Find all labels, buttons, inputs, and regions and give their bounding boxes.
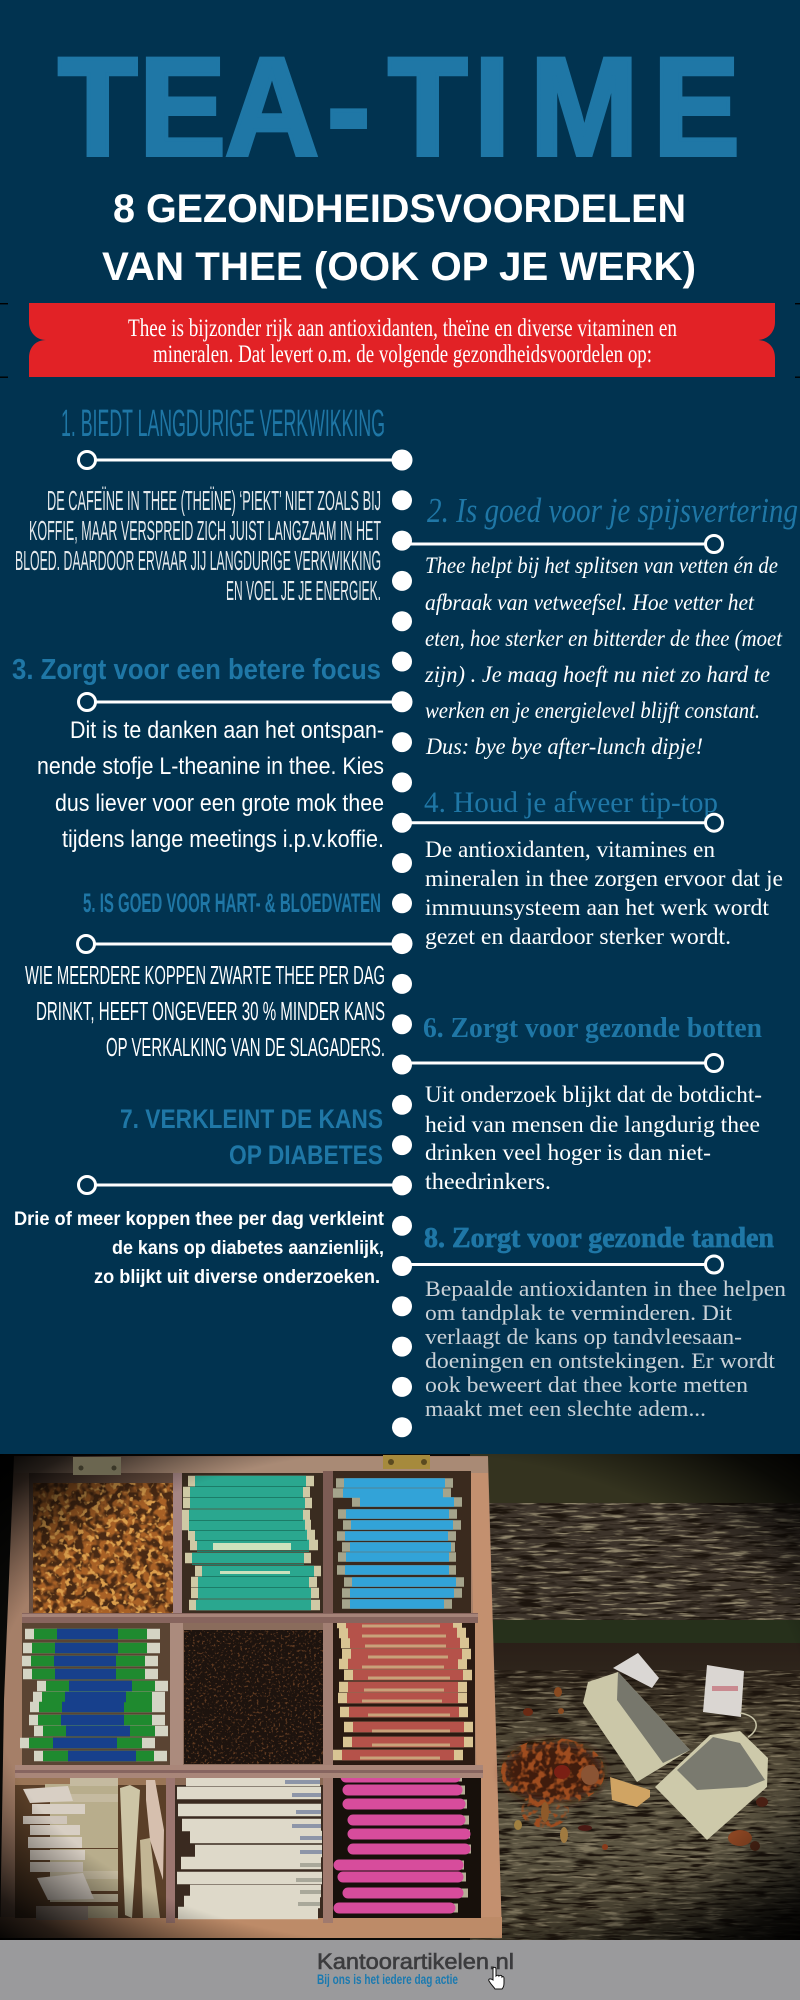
background xyxy=(0,0,800,1455)
body text 7: Drie of meer koppen thee per dag verkleint xyxy=(14,1208,384,1230)
subtitle xyxy=(102,187,696,289)
body text 8: maakt met een slechte adem... xyxy=(425,1396,706,1421)
subtitle: VAN THEE (OOK OP JE WERK) xyxy=(102,245,696,289)
body text 3: tijdens lange meetings i.p.v.koffie. xyxy=(62,826,384,853)
loose fruit tea xyxy=(33,1483,173,1613)
heading 7: OP DIABETES xyxy=(229,1140,383,1170)
box dividers xyxy=(15,1471,483,1923)
panel: benefit 3 xyxy=(12,654,402,853)
body text 7: de kans op diabetes aanzienlijk, xyxy=(112,1237,384,1259)
body text 3 xyxy=(37,717,384,853)
body text 1 xyxy=(15,485,381,606)
body text 2: Dus: bye bye after-lunch dipje! xyxy=(425,734,703,759)
intro banner: mineralen. Dat levert o.m. de volgende gezondheidsvoordelen op: xyxy=(153,341,652,368)
body text 5: DRINKT, HEEFT ONGEVEER 30 % MINDER KANS xyxy=(36,996,385,1026)
pink tea bags xyxy=(339,1777,471,1908)
panel: benefit 6 xyxy=(402,1012,762,1194)
teabag 1 xyxy=(583,1653,690,1782)
intro banner xyxy=(0,303,800,378)
footer bar xyxy=(0,1940,800,2000)
body text 6: heid van mensen die langdurig thee xyxy=(425,1112,760,1137)
heading 3: 3. Zorgt voor een betere focus xyxy=(12,654,381,686)
connector 4 xyxy=(402,814,722,831)
body text 8: Bepaalde antioxidanten in thee helpen xyxy=(425,1276,786,1301)
heading 6: 6. Zorgt voor gezonde botten xyxy=(423,1012,762,1044)
title: TEA-TIME: TEA-TIME xyxy=(58,29,740,185)
heading 7: 7. VERKLEINT DE KANS xyxy=(120,1104,383,1134)
body text 5 xyxy=(25,960,385,1062)
loose tea pile xyxy=(501,1687,768,1851)
heading 7 xyxy=(120,1104,383,1170)
logo text: Kantoorartikelen.nl xyxy=(317,1949,514,1974)
cream tea bags with labels xyxy=(23,1780,164,1920)
body text 8: ook beweert dat thee korte metten xyxy=(425,1372,748,1397)
heading 8: 8. Zorgt voor gezonde tanden xyxy=(424,1222,774,1254)
body text 6: theedrinkers. xyxy=(425,1169,551,1194)
tagline: Bij ons is het iedere dag actie xyxy=(317,1971,458,1987)
photo: tea box and tea bags on wood xyxy=(0,1454,800,1940)
subtitle: 8 GEZONDHEIDSVOORDELEN xyxy=(113,187,686,231)
brass hinges xyxy=(73,1455,430,1475)
white tea bags xyxy=(177,1780,322,1913)
body text 8 xyxy=(425,1276,786,1421)
connector 7 xyxy=(78,1176,402,1194)
panel: benefit 8 xyxy=(402,1222,786,1421)
connector 6 xyxy=(402,1054,722,1072)
heading 4: 4. Houd je afweer tip-top xyxy=(424,786,718,819)
body text 2 xyxy=(424,553,783,759)
connector 2 xyxy=(402,536,722,552)
blue tea bags xyxy=(333,1483,464,1604)
black tea xyxy=(184,1630,323,1764)
vignette xyxy=(0,1454,800,1940)
infographic canvas: EN VOEL JE JE ENERGIEK. xyxy=(226,575,381,606)
biscuit piece xyxy=(610,1777,650,1807)
body text 8: om tandplak te verminderen. Dit xyxy=(425,1300,732,1325)
infographic canvas: 1. BIEDT LANGDURIGE VERKWIKKING xyxy=(61,403,385,445)
body text 4: De antioxidanten, vitamines en xyxy=(425,837,715,862)
compartment backgrounds xyxy=(15,1471,481,1918)
panel: benefit 5 xyxy=(25,888,402,1062)
body text 3: Dit is te danken aan het ontspan- xyxy=(70,717,384,744)
body text 5: OP VERKALKING VAN DE SLAGADERS. xyxy=(106,1032,385,1062)
body text 4: immuunsysteem aan het werk wordt xyxy=(425,895,770,920)
body text 5: WIE MEERDERE KOPPEN ZWARTE THEE PER DAG xyxy=(25,960,385,990)
body text 4 xyxy=(425,837,783,949)
blue and green tea bags xyxy=(20,1634,168,1756)
panel: benefit 4 xyxy=(402,786,783,949)
body text 6 xyxy=(425,1082,762,1194)
wooden box frame xyxy=(0,1456,502,1938)
teal tea bags xyxy=(182,1481,321,1605)
red tea bags xyxy=(333,1623,473,1758)
teabag 2 xyxy=(655,1665,768,1840)
body text 6: drinken veel hoger is dan niet- xyxy=(425,1140,711,1165)
body text 6: Uit onderzoek blijkt dat de botdicht- xyxy=(425,1082,762,1107)
body text 8: verlaagt de kans op tandvleesaan- xyxy=(425,1324,742,1349)
body text 3: dus liever voor een grote mok thee xyxy=(55,790,384,817)
body text 2: werken en je energielevel blijft constant. xyxy=(425,698,760,723)
body text 4: mineralen in thee zorgen ervoor dat je xyxy=(425,866,783,891)
icon: hand cursor xyxy=(489,1967,504,1989)
body text 7 xyxy=(14,1208,384,1288)
wooden table xyxy=(470,1454,800,1940)
connector 5 xyxy=(78,936,402,952)
body text 8: doeningen en ontstekingen. Er wordt xyxy=(425,1348,775,1373)
panel: benefit 7 xyxy=(14,1104,402,1288)
body text 3: nende stofje L-theanine in thee. Kies xyxy=(37,753,384,780)
panel: benefit 2 xyxy=(402,491,798,759)
timeline dots xyxy=(392,450,412,1437)
connector 3 xyxy=(78,694,402,710)
body text 7: zo blijkt uit diverse onderzoeken. xyxy=(94,1266,380,1288)
heading 5: 5. IS GOED VOOR HART- & BLOEDVATEN xyxy=(83,888,381,918)
infographic canvas: KOFFIE, MAAR VERSPREID ZICH JUIST LANGZAAM IN HET xyxy=(29,515,381,546)
body text 2: zijn) . Je maag hoeft nu niet zo hard te xyxy=(424,662,770,687)
infographic canvas: DE CAFEÏNE IN THEE (THEÏNE) ‘PIEKT’ NIET ZOALS BIJ xyxy=(47,485,381,516)
panel: benefit 1 xyxy=(15,403,402,606)
connector 8 xyxy=(402,1256,722,1273)
body text 2: afbraak van vetweefsel. Hoe vetter het xyxy=(425,590,755,615)
body text 4: gezet en daardoor sterker wordt. xyxy=(425,924,731,949)
connector 1 xyxy=(78,452,402,468)
